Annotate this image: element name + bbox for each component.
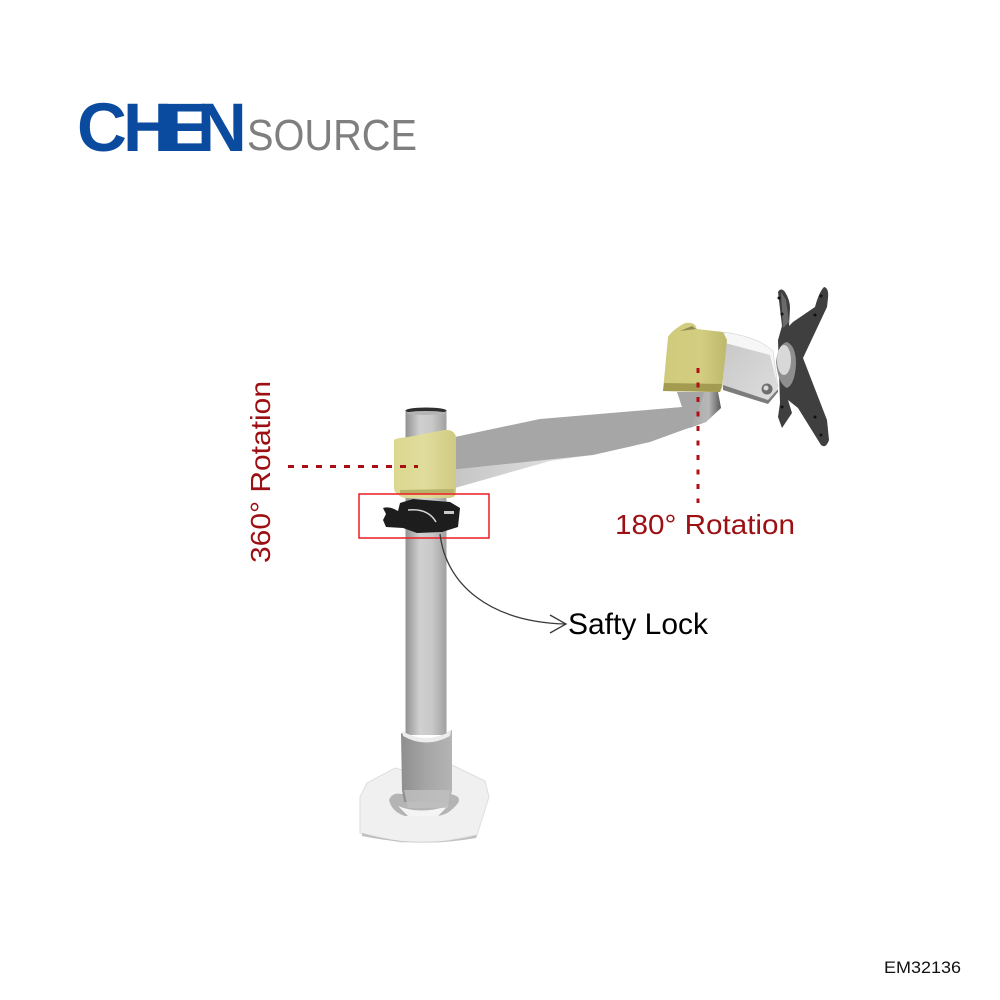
yellow highlight: 360 degree joint bbox=[394, 430, 456, 498]
VESA plate bbox=[776, 287, 829, 446]
logo wordmark: SOURCE: SOURCE bbox=[247, 111, 417, 160]
red highlight box: safety lock bbox=[359, 494, 489, 538]
yellow highlight: 180 degree joint bbox=[663, 323, 727, 392]
arm upper body bbox=[450, 392, 721, 470]
pole bbox=[406, 408, 446, 735]
model number: EM32136 bbox=[884, 958, 961, 977]
arm highlight underside bbox=[450, 455, 593, 488]
desk base bbox=[360, 765, 489, 843]
tilt head bbox=[723, 332, 778, 404]
label: 180 rotation: 180° Rotation bbox=[615, 509, 795, 540]
logo wordmark: CHEN: CHEN bbox=[77, 89, 247, 166]
dashed leader: 360 rotation bbox=[288, 465, 418, 468]
monitor arm product bbox=[360, 287, 829, 843]
label: 360 rotation: 360° Rotation bbox=[245, 381, 276, 563]
safety lock clamp bbox=[383, 499, 460, 533]
logo bbox=[77, 89, 417, 166]
curved arrow to safety lock label bbox=[440, 534, 566, 633]
label: safety lock: Safty Lock bbox=[568, 608, 709, 641]
dashed leader: 180 rotation bbox=[696, 368, 700, 503]
horizontal arm bbox=[450, 392, 721, 488]
pole collar bbox=[401, 730, 452, 808]
